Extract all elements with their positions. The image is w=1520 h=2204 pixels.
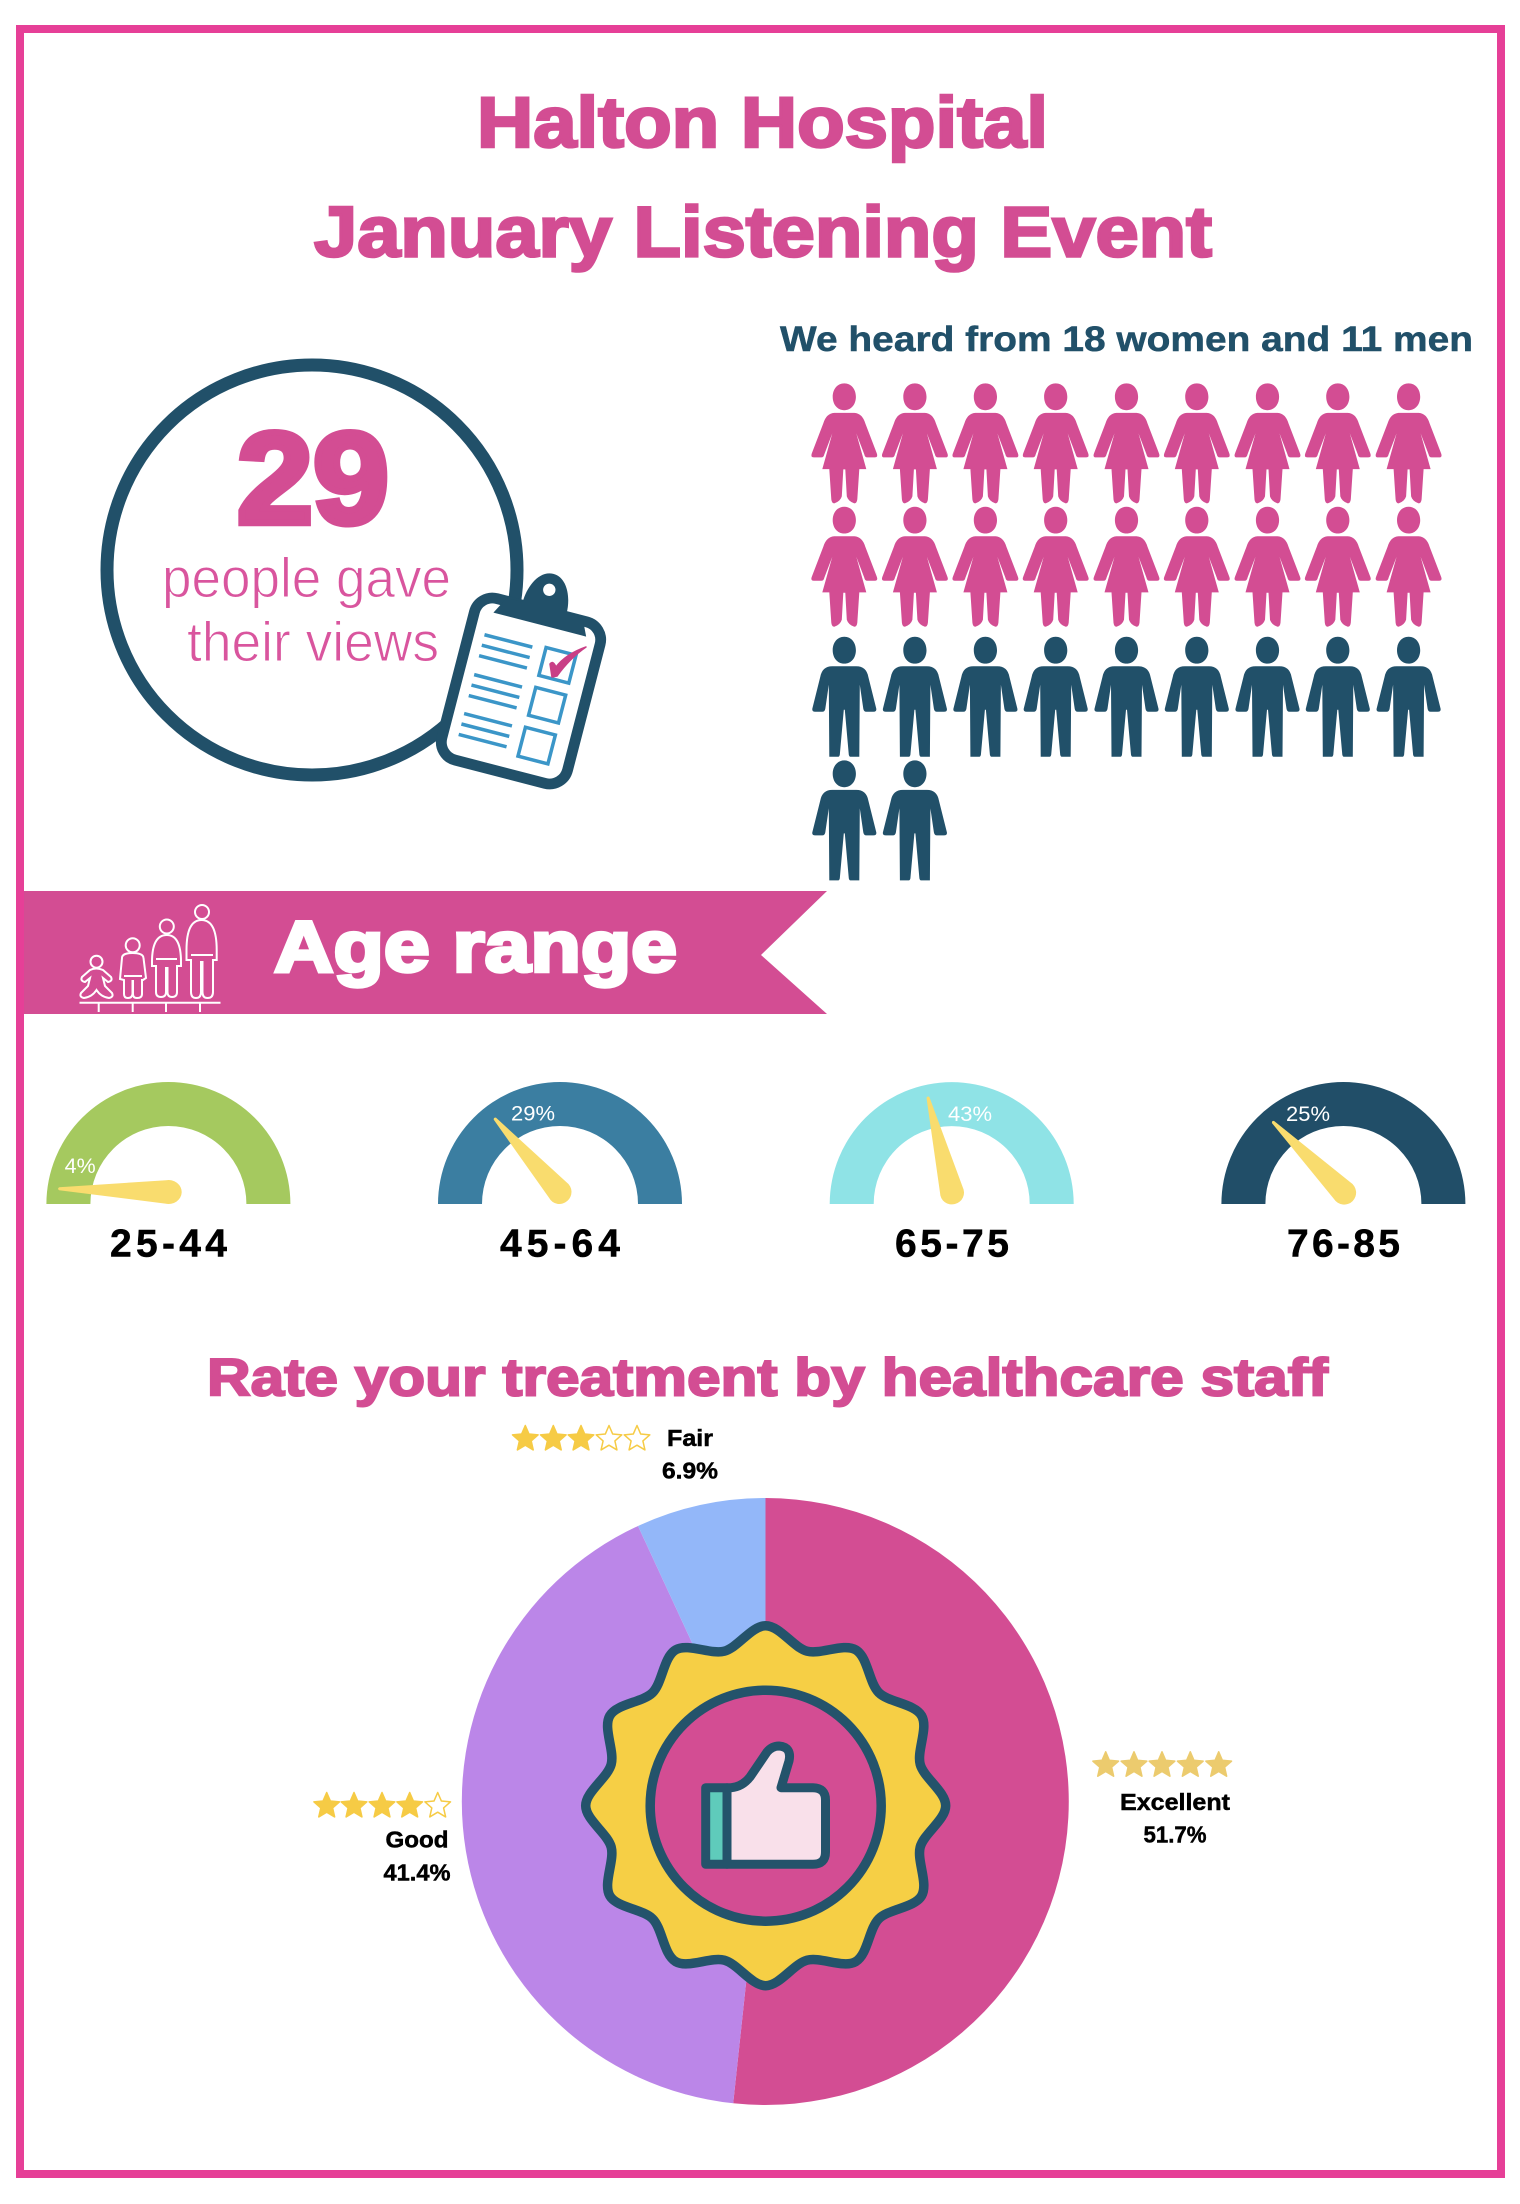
pictogram: 18 women [811,383,1442,627]
legend: good [314,1792,451,1886]
icon: badge [586,1626,946,1986]
gauge: 25-44: 25-44 [110,1223,227,1266]
legend: fair: 6.9% [662,1458,718,1484]
title: Halton Hospital [477,84,1048,163]
gauge: 25-44 [46,1082,290,1266]
pictogram: 11 men [812,637,1441,880]
banner: age range [24,891,827,1014]
gauge: 65-75 [830,1082,1074,1266]
icon: clipboard [437,557,614,788]
gauge: 65-75: 65-75 [895,1223,1009,1266]
gauge: 76-85: 76-85 [1287,1223,1400,1266]
gauge: 25-44: 4% [65,1155,96,1178]
gauge: 45-64 [438,1082,682,1266]
big number 29: 29 [237,405,389,551]
legend: excellent: Excellent [1120,1789,1230,1815]
gauge: 45-64: 29% [511,1103,555,1126]
caption: their views [187,610,439,673]
pie chart [462,1498,1069,2105]
caption [162,546,451,673]
icon: thumbs up [706,1746,826,1864]
caption: people gave [162,546,451,609]
panel: 29 people gave their views [107,365,614,788]
gender heading: We heard from 18 women and 11 men [780,320,1473,359]
legend: excellent [1093,1752,1232,1847]
gauge: 45-64: 45-64 [500,1223,620,1266]
banner heading: Age range [274,908,677,988]
gauge: 65-75: 43% [948,1103,992,1126]
legend: excellent: 51.7% [1144,1821,1207,1847]
legend: good: Good [386,1827,448,1853]
legend: fair: Fair [667,1425,713,1451]
title: January Listening Event [314,194,1212,273]
gauge: 76-85: 25% [1286,1103,1330,1126]
heading: rate your treatment: Rate your treatment by healthcare staff [207,1349,1328,1408]
gauge: 76-85 [1221,1082,1465,1266]
icon: people growing [80,905,220,1012]
slice: excellent [733,1498,1069,2105]
title [314,84,1212,273]
slice: fair [638,1498,766,1802]
circle outline [107,365,517,775]
slice: good [462,1526,766,2103]
legend: fair [512,1425,718,1484]
legend: good: 41.4% [384,1860,451,1886]
